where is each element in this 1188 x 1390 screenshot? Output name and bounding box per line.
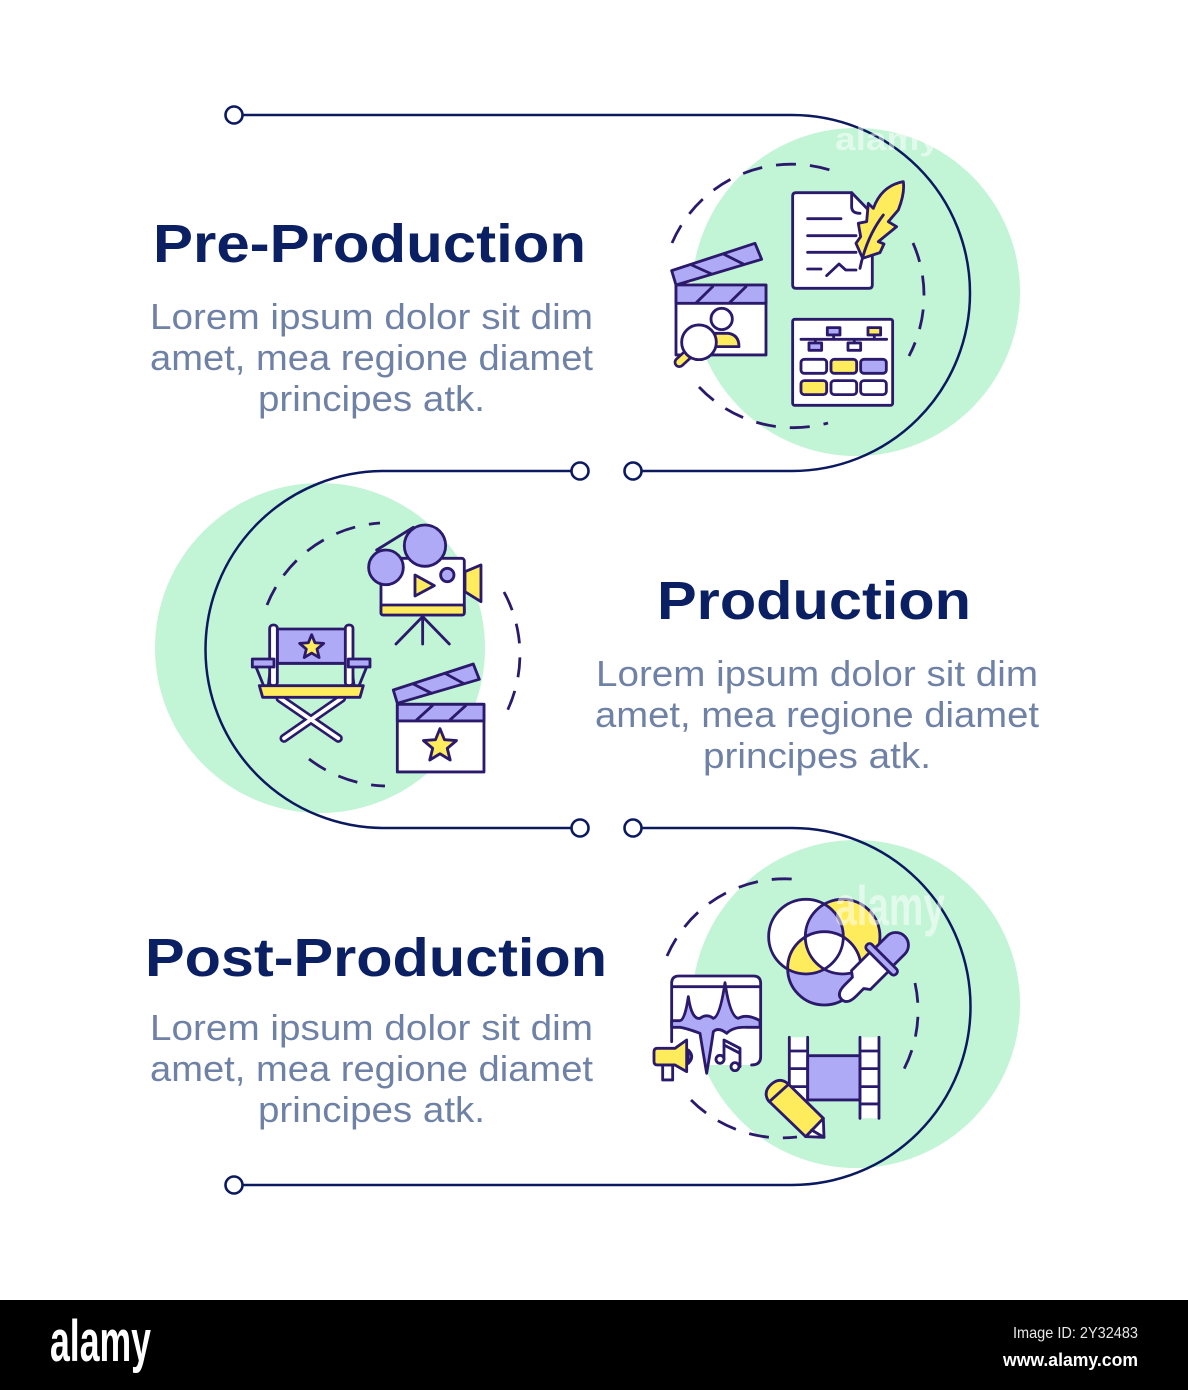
connector line: post-production	[226, 820, 971, 1194]
text block: post-production description: Lorem ipsum dolor sit dim	[150, 1007, 593, 1048]
connector line: pre-production	[226, 106, 970, 480]
icon: colour wheel with dropper	[769, 899, 919, 1014]
icon group: pre-production	[672, 182, 904, 405]
icon: film strip with pencil	[766, 1037, 879, 1137]
icon group: production	[252, 525, 484, 772]
text block: pre-production description: principes atk.	[258, 378, 485, 419]
text block: production description: Lorem ipsum dolor sit dim	[596, 653, 1038, 694]
heading: Post-Production: Post-Production	[145, 928, 607, 988]
icon: schedule board	[793, 319, 893, 405]
text block: pre-production description	[150, 296, 593, 419]
heading: Pre-Production: Pre-Production	[153, 214, 586, 274]
heading: Production: Production	[657, 571, 971, 631]
icon: star clapperboard	[393, 664, 484, 772]
watermark: lower: alamy	[835, 874, 945, 937]
icon: script with quill	[793, 182, 904, 288]
text block: pre-production description: amet, mea regione diamet	[150, 337, 593, 378]
connector line: production	[206, 462, 589, 836]
text block: post-production description: amet, mea regione diamet	[150, 1048, 593, 1089]
dashed ring: pre-production	[672, 164, 924, 428]
icon: film camera on tripod	[369, 525, 481, 644]
text block: post-production description: principes atk.	[258, 1089, 485, 1130]
text block: post-production description	[150, 1007, 593, 1130]
icon: sound wave with notes and megaphone	[654, 976, 761, 1080]
dashed ring: post-production	[667, 879, 918, 1138]
green circle: production	[155, 483, 485, 813]
website: www.alamy.com	[1002, 1350, 1138, 1370]
image id: Image ID: 2Y32483	[1013, 1325, 1138, 1342]
text block: production description: principes atk.	[703, 735, 931, 776]
footer bar	[0, 1300, 1188, 1390]
text block: production description: amet, mea regione diamet	[595, 694, 1039, 735]
footer logo: alamy	[50, 1309, 151, 1374]
text block: production description	[595, 653, 1039, 776]
icon group: post-production	[654, 899, 919, 1137]
text block: pre-production description: Lorem ipsum dolor sit dim	[150, 296, 593, 337]
watermark: upper: alamy	[835, 121, 940, 157]
green circle: post-production	[692, 840, 1020, 1168]
icon: director's chair	[252, 625, 370, 738]
dashed ring: production	[267, 523, 520, 786]
icon: casting clapperboard	[672, 243, 766, 362]
green circle: pre-production	[692, 128, 1020, 456]
